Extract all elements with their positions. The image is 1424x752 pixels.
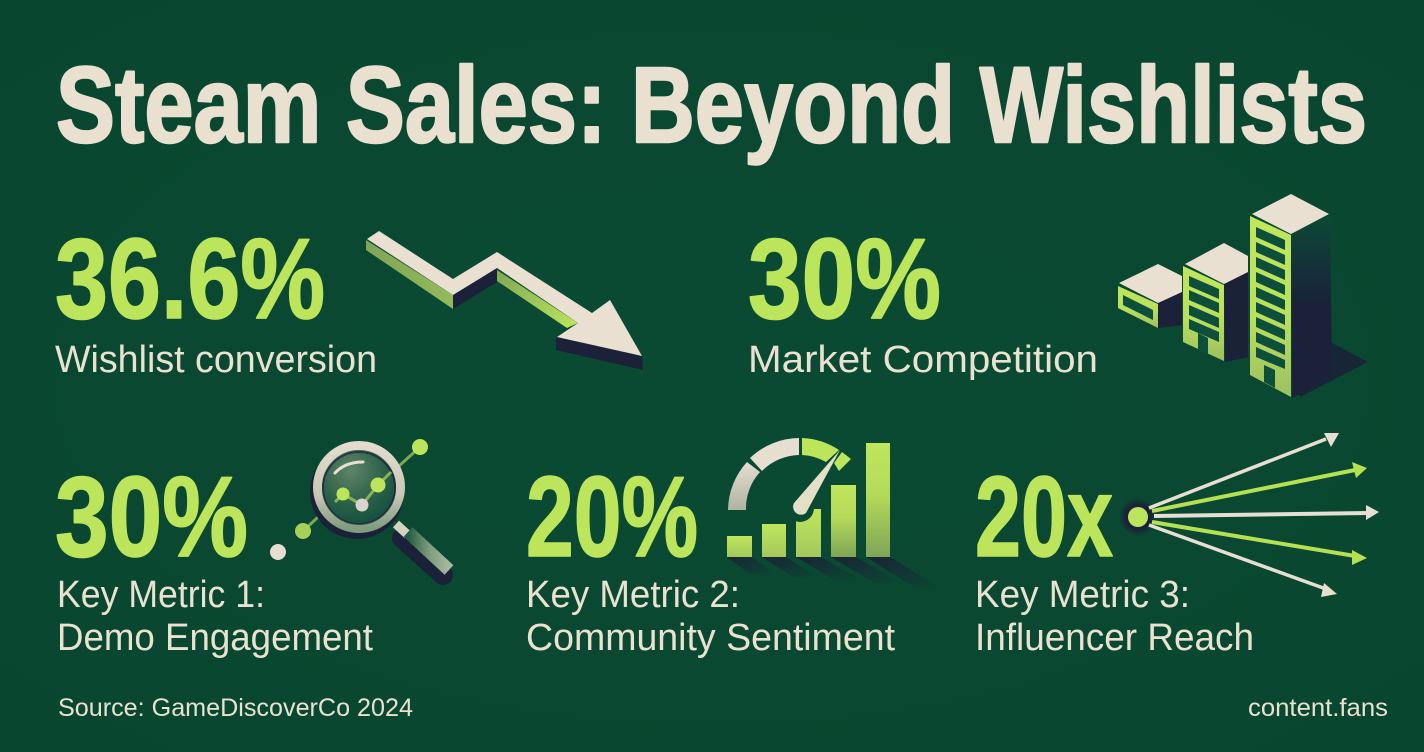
icon: rising buildings [1118,194,1368,398]
stat: 30%: 30% [55,454,248,581]
label: influencer reach: Influencer Reach [975,617,1254,659]
icon: gauge and bars [727,438,940,588]
icon: magnifying glass over trend line [270,439,449,575]
stat: 20%: 20% [526,454,698,581]
icon: radiating reach arrows [1119,433,1379,597]
source note: Source: GameDiscoverCo 2024 [58,694,413,722]
panel: wishlist conversion [55,216,643,381]
label: wishlist conversion: Wishlist conversion [55,339,377,381]
stat: 20x: 20x [975,454,1113,581]
label: key metric 2: Key Metric 2: [526,574,740,616]
panel: key metric 2 [526,438,940,659]
panel: key metric 1 [55,439,449,659]
brand credit: content.fans [1248,694,1388,722]
label: demo engagement: Demo Engagement [57,617,373,659]
icon: falling arrow [366,231,643,370]
stat: 36.6%: 36.6% [55,216,325,343]
panel: key metric 3 [975,433,1379,659]
label: community sentiment: Community Sentiment [526,617,895,659]
stat: 30%: 30% [748,216,941,343]
label: key metric 1: Key Metric 1: [57,574,265,616]
panel: market competition [748,194,1368,398]
label: key metric 3: Key Metric 3: [975,574,1190,616]
label: market competition: Market Competition [748,339,1098,381]
